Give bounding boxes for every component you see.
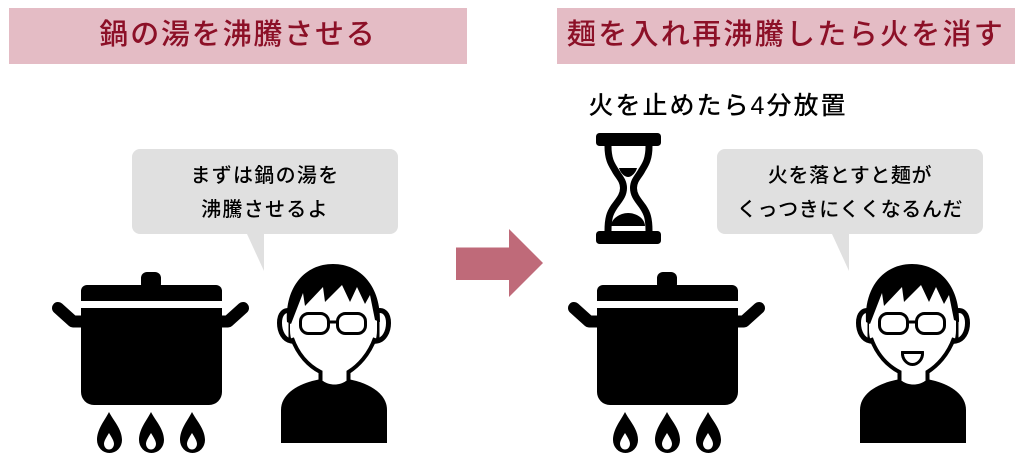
icon: hourglass [596,133,661,244]
text: right bubble: くっつきにくくなるんだ [737,199,963,221]
icon: pot on burner, left [58,272,243,453]
text: right bubble: 火を落とすと麺が [768,165,932,187]
heading: right [557,8,1015,64]
text: right bubble [737,164,963,221]
heading: left [9,8,467,64]
speech bubble: right [717,149,983,271]
text: timer caption: 火を止めたら4分放置 [589,92,847,120]
icon: smiling person with glasses, right [858,264,968,443]
text: left bubble: 沸騰させるよ [201,199,329,221]
arrow [456,229,543,297]
heading: left: 鍋の湯を沸騰させる [99,19,377,51]
speech bubble: left [132,149,398,271]
icon: pot on burner, right [574,272,759,453]
icon: person with glasses, left [280,264,388,443]
text: left bubble: まずは鍋の湯を [190,165,340,187]
text: left bubble [190,165,340,221]
heading: right: 麺を入れ再沸騰したら火を消す [567,19,1005,51]
